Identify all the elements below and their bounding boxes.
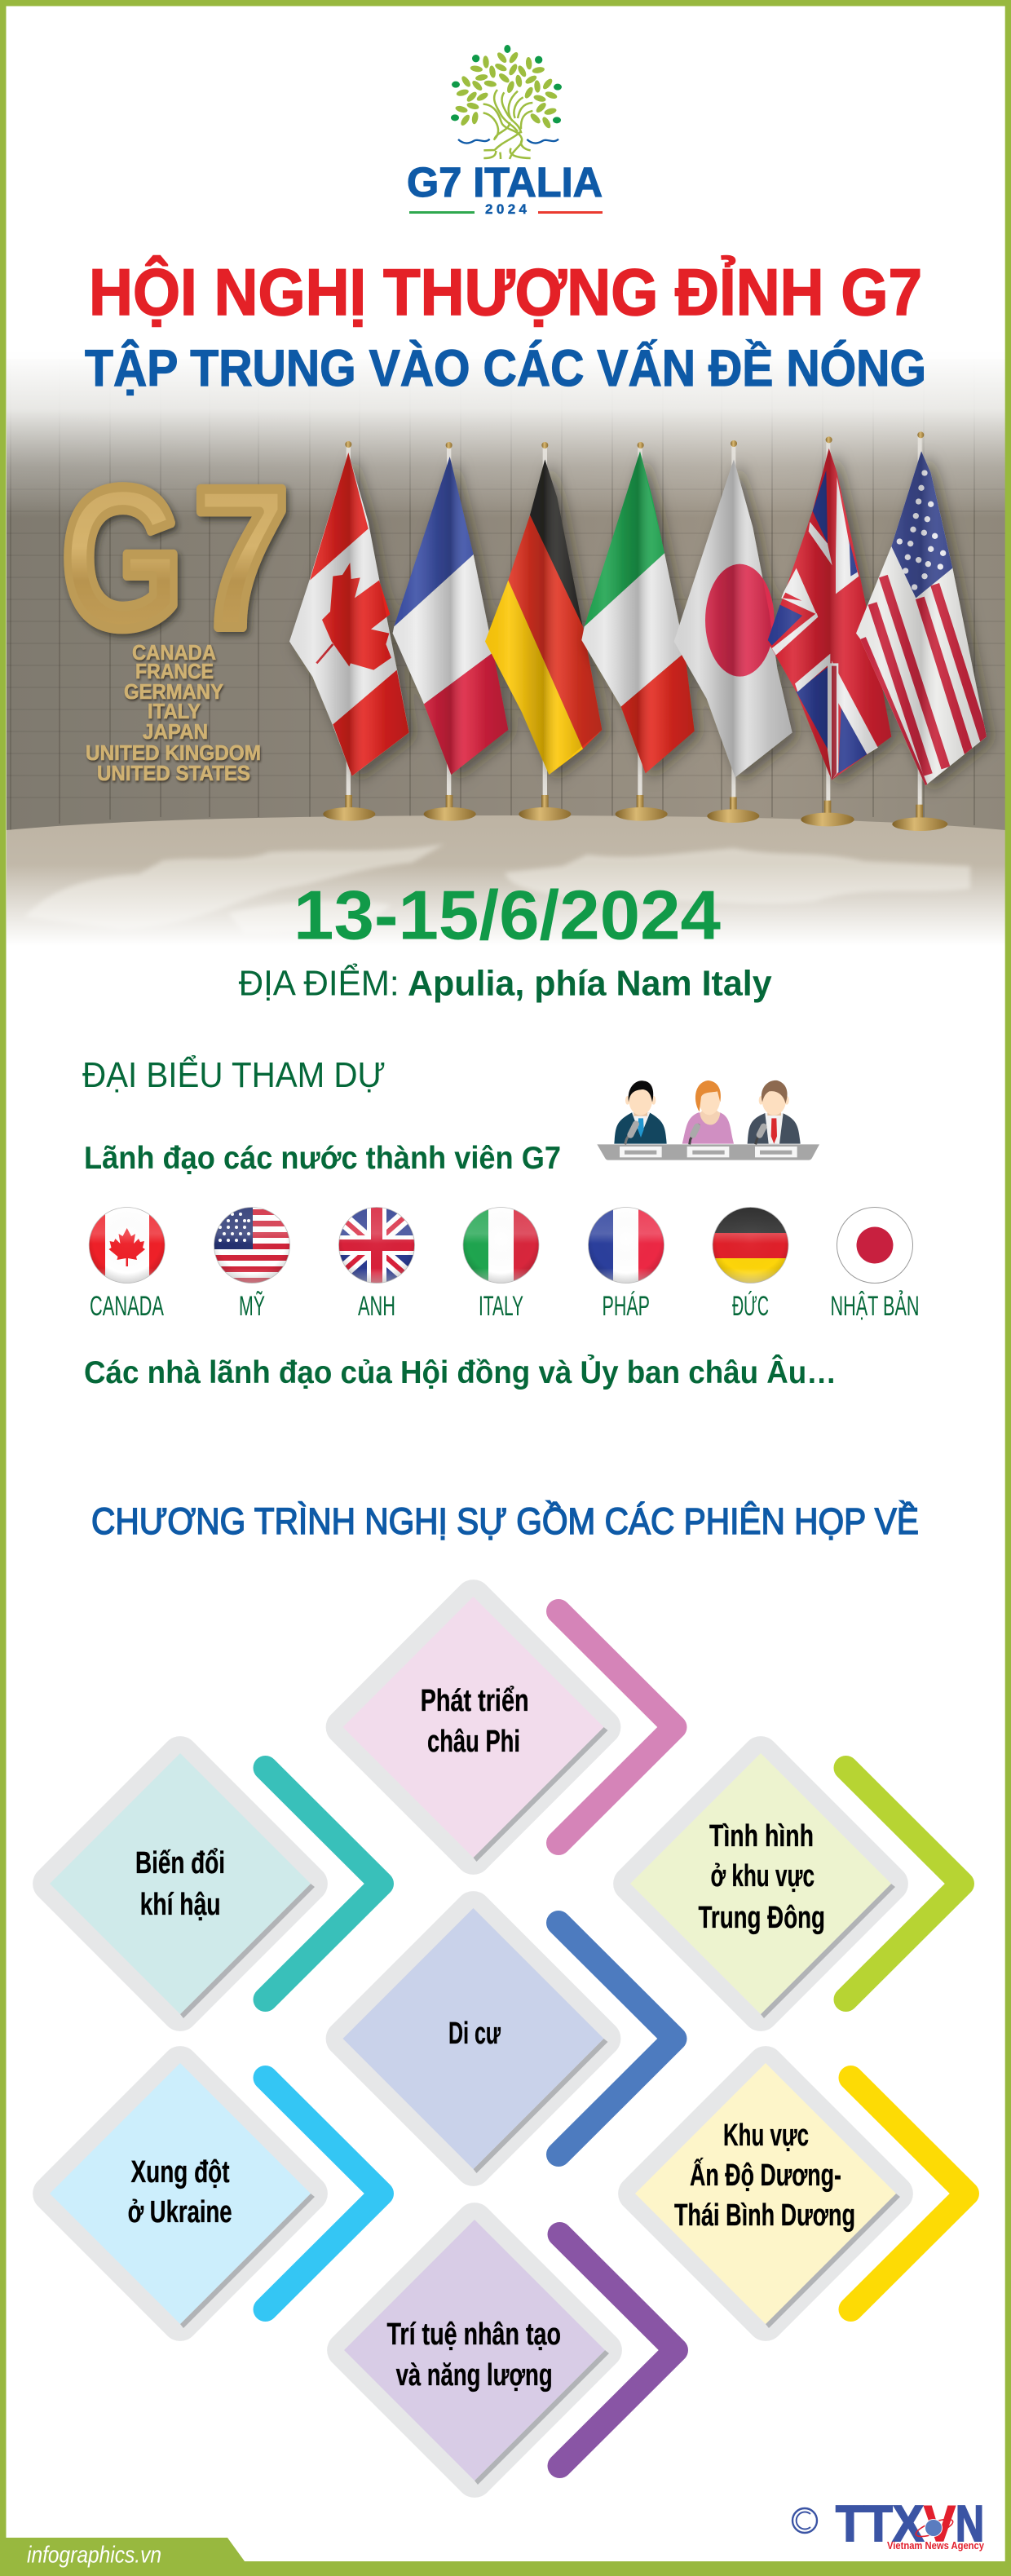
flag badge: USA [214, 1207, 290, 1284]
agenda: climate change: khí hậu [140, 1888, 221, 1922]
flag labels: PHÁP [602, 1291, 650, 1322]
gold country names: CANADA [132, 640, 216, 665]
text: European leaders: Các nhà lãnh đạo của Hội đồng và Ủy ban châu Âu… [84, 1354, 837, 1390]
agenda: migration: Di cư [448, 2017, 501, 2051]
agenda: Middle East: Tình hình [709, 1819, 814, 1854]
logo: TTXVN [836, 2496, 984, 2552]
flag labels: CANADA [90, 1291, 164, 1322]
flag badge: Italy [463, 1207, 540, 1284]
logo: G7 Italia [407, 45, 603, 217]
gold country names: GERMANY [124, 679, 223, 704]
agenda: AI and energy: và năng lượng [396, 2358, 553, 2393]
flags: Canada, France, Germany [289, 453, 602, 776]
flag: Canada [289, 453, 409, 776]
bottom fade [7, 864, 1005, 946]
flag: Italy [581, 451, 695, 773]
agenda: Indo-Pacific: Khu vực [723, 2119, 809, 2153]
footer site name: infographics.vn [27, 2543, 161, 2569]
heading: delegates: ĐẠI BIỂU THAM DỰ [82, 1054, 386, 1095]
copyright mark [792, 2508, 817, 2533]
country flags row [89, 1207, 913, 1284]
floor [7, 815, 1005, 946]
logo: TTXVN: N [956, 2496, 984, 2552]
agenda: Ukraine conflict: Xung đột [130, 2155, 230, 2189]
title line 2: TẬP TRUNG VÀO CÁC VẤN ĐỀ NÓNG [85, 339, 926, 397]
photo: G7 flags against wall [7, 351, 1005, 946]
gold country names: UNITED STATES [97, 761, 250, 785]
gold G7 letters: 7 [193, 446, 289, 670]
footer bar [0, 2538, 1011, 2576]
flag badge: Japan [837, 1207, 913, 1284]
agenda: Ukraine conflict: ở Ukraine [128, 2195, 232, 2229]
flag badge: France [588, 1207, 664, 1284]
heading: agenda: CHƯƠNG TRÌNH NGHỊ SỰ GỒM CÁC PHIÊN HỌP VỀ [91, 1500, 919, 1542]
agenda: Indo-Pacific [611, 2039, 967, 2348]
agenda: Africa development [319, 1572, 675, 1882]
gold country names: FRANCE [135, 659, 214, 683]
subheading: G7 leaders: Lãnh đạo các nước thành viên G7 [84, 1141, 561, 1176]
logo green line [409, 211, 475, 214]
logo wordmark: G7 ITALIA [407, 159, 603, 205]
icon: three delegates at a table [597, 1080, 819, 1160]
agenda: migration [319, 1884, 675, 2194]
logo year: 2024 [485, 201, 528, 217]
flag labels: ITALY [479, 1291, 523, 1322]
logo: TTXVN: V [924, 2496, 956, 2552]
gold country names [86, 640, 261, 785]
gold country names: JAPAN [143, 719, 208, 744]
gold country names: UNITED KINGDOM [86, 740, 261, 765]
title line 1: HỘI NGHỊ THƯỢNG ĐỈNH G7 [89, 254, 922, 329]
agenda: climate change [25, 1729, 382, 2039]
agenda: AI and energy [320, 2195, 676, 2505]
flag: Germany [485, 459, 602, 775]
flag labels: NHẬT BẢN [830, 1291, 920, 1322]
logo: TTXVN: Vietnam News Agency [887, 2540, 984, 2552]
icon: olive tree [451, 45, 562, 159]
top fade [7, 351, 1005, 518]
flag labels: ANH [358, 1291, 395, 1322]
gold country names: ITALY [148, 699, 201, 723]
flag: United Kingdom [768, 448, 891, 780]
agenda: Ukraine conflict [25, 2039, 382, 2348]
location: ĐỊA ĐIỂM: [239, 962, 400, 1003]
flag badge: Germany [713, 1207, 789, 1284]
flag labels: MỸ [239, 1291, 265, 1322]
right flag poles and bases [707, 431, 947, 831]
agenda: Indo-Pacific: Ấn Độ Dương- [690, 2157, 841, 2193]
flag: Japan [674, 459, 792, 777]
logo red line [538, 211, 603, 214]
floor world map [24, 844, 970, 934]
agenda: AI and energy: Trí tuệ nhân tạo [386, 2318, 561, 2352]
agenda: Africa development: Phát triển [421, 1684, 529, 1718]
flag: United States [856, 451, 987, 789]
date: 13-15/6/2024 [294, 877, 721, 954]
agenda: Indo-Pacific: Thái Bình Dương [674, 2198, 855, 2233]
flag: France [393, 457, 508, 775]
flags: Italy, Japan, UK, USA [581, 448, 987, 789]
flag badge: Canada [89, 1207, 166, 1284]
logo: TTXVN: TTX [836, 2496, 924, 2552]
location [239, 962, 772, 1003]
location: Apulia, phía Nam Italy [408, 964, 772, 1003]
flag labels [90, 1291, 920, 1322]
gold G7 letters [61, 446, 289, 670]
agenda: climate change: Biến đổi [135, 1846, 225, 1880]
left flag poles and bases [323, 441, 668, 821]
agenda: Africa development: châu Phi [427, 1725, 520, 1759]
agenda: Middle East [606, 1729, 962, 2039]
agenda: Middle East: Trung Đông [698, 1901, 825, 1935]
flag badge: UK [338, 1207, 415, 1284]
flag labels: ĐỨC [732, 1291, 769, 1322]
gold G7 letters: G [61, 446, 183, 670]
agenda: Middle East: ở khu vực [711, 1859, 815, 1893]
